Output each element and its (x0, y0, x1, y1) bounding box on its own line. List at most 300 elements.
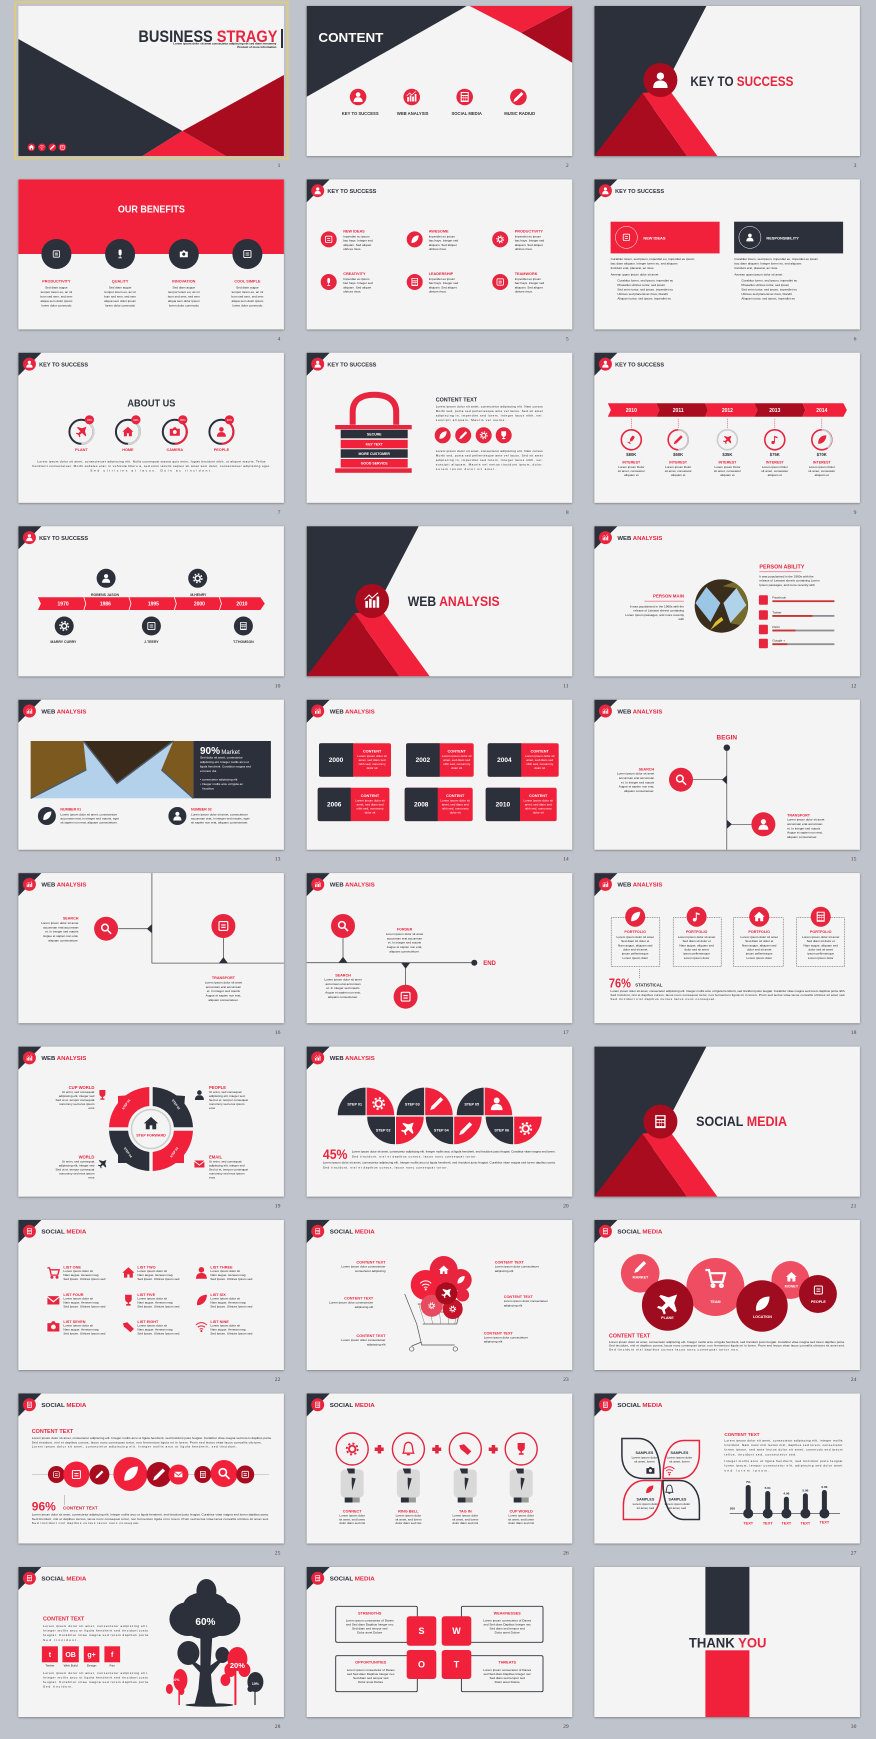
hand text: sit amet, sed lorem (395, 1518, 422, 1522)
list items row 3: LIST NINE (210, 1320, 229, 1324)
contents labels: KEY TO SUCCESS (342, 111, 379, 116)
bubbles text: CONTENT TEXT (609, 1334, 651, 1340)
slide 6: new ideas and responsibility (594, 179, 860, 329)
list items row 3: LIST SEVEN (63, 1320, 86, 1324)
new ideas banner (611, 222, 720, 253)
search text: et. In integer sed mauris (45, 930, 79, 934)
social labels: Twitter (772, 610, 782, 614)
market panel: Sed dolor sit amet, consectetur (200, 756, 243, 760)
search text: accumsan erat accumsan (43, 925, 79, 929)
search text: aliquam consectetuer. (48, 938, 79, 942)
page number 29: 29 (563, 1724, 569, 1730)
card 2006 (318, 788, 389, 821)
slide header (23, 1398, 87, 1411)
card 2000: CONTENT (363, 750, 382, 754)
idea 4: aliquam. Sed aliquet (343, 285, 371, 289)
folder node (394, 985, 418, 1009)
slide header: WEB ANALYSIS (617, 709, 663, 715)
slide 15: begin timeline (594, 700, 860, 850)
page number 15: 15 (851, 857, 857, 863)
number 02: Lorem ipsum dolor sit amet, consectetuer (191, 812, 248, 816)
cover title: BUSINESS STRAGY (138, 27, 278, 46)
list items row 1: Sed Ipsum. Ultrices Ipsum sed (210, 1277, 253, 1281)
search text: Augue et sapien non erat, (43, 934, 79, 938)
portfolio column 4: PORTFOLIO (810, 930, 832, 934)
world icon (98, 1160, 106, 1168)
content paragraph top: Morbi sed, porta sed pellentesque ante vel lacus. Sed sit amet (436, 409, 543, 413)
slide 30: thank you (594, 1567, 860, 1717)
page number 28: 28 (275, 1724, 281, 1730)
tree percentages: 10% (252, 1682, 260, 1686)
card 2006: nibh sed, nonummy (357, 807, 384, 811)
year ribbon: 2012 (722, 408, 733, 414)
card 2004: Lorem ipsum dolor sit (525, 754, 555, 758)
benefits heading: OUR BENEFITS (118, 204, 185, 215)
person ability block: Ipsum passages, and more recently with (759, 583, 815, 587)
person ability underline (759, 570, 801, 573)
email text: EMAIL (209, 1155, 222, 1160)
right callouts: adipiscing elit (495, 1269, 513, 1273)
number 02: sit sapien non erat, aliquam consectetuer. (191, 821, 248, 825)
hand labels: CONNECT (343, 1510, 362, 1514)
transport text: Lorem ipsum dolor sit amet (205, 981, 242, 985)
benefit text column 1: Sed diam augue (45, 285, 68, 289)
search text: Augue et sapien non erat, (619, 785, 654, 789)
slide header: WEB ANALYSIS (41, 709, 87, 715)
portfolio column 3: PORTFOLIO (748, 930, 770, 934)
card 2006: dolor sit (365, 811, 376, 815)
list items row 2: LIST SIX (210, 1293, 226, 1297)
page number 2: 2 (566, 163, 569, 169)
contents labels: WEB ANALYSIS (397, 111, 429, 116)
card 2000: 2000 (329, 757, 344, 764)
search text: aliquam consectetuer. (328, 995, 358, 999)
interest text: Lorem ipsum Dolor (618, 465, 644, 469)
transport node (751, 812, 775, 836)
lower tree text: Lorem ipsum dolor sit amet, consectetur adipiscing elit. (43, 1671, 148, 1675)
slide 22: nine list items (18, 1220, 284, 1370)
cup world text: Ut enim, sed consequat (62, 1090, 95, 1094)
strengths: Lorem ipsum consectetur of Danes (346, 1618, 394, 1622)
list items row 3: Nam augue. Aenean mag (137, 1328, 173, 1332)
people text: nonummy sed eros ipsum (209, 1102, 245, 1106)
threats: Dolor amet Dolore (495, 1680, 520, 1684)
thermometer values: 5.01 (765, 1486, 771, 1490)
transport text: et. In integer sed mauris (787, 826, 821, 830)
slide 1: cover (18, 6, 284, 156)
section title: SOCIAL MEDIA (696, 1113, 787, 1129)
idea 2: bac hays. Integer sed (429, 239, 459, 243)
slide 16: search and transport (18, 873, 284, 1023)
list items row 3: LIST EIGHT (137, 1320, 159, 1324)
idea 5: LEADERSHIP (429, 272, 454, 276)
right column text: Phasellus ultrices tortor, sed ipsum (741, 283, 790, 287)
interest labels: INTEREST (669, 460, 688, 464)
idea 2: AWESOME (429, 229, 449, 233)
cover subtitle: Product of more information (237, 45, 277, 49)
petal labels: sit amet, lorem (669, 1460, 690, 1464)
tree percentages: 10% (172, 1678, 180, 1682)
search text: Augue et sapien non erat, (325, 990, 361, 994)
card 2006: CONTENT (361, 794, 380, 798)
card 2010 (486, 788, 557, 821)
petal labels: Lorem ipsum dolor (632, 1456, 657, 1460)
weaknesses: Dolor amet Dolore (495, 1630, 520, 1634)
selected slide highlight frame (15, 2, 288, 158)
benefit text column 1: aliqua sem dolor ipsum (40, 299, 73, 303)
number 01: accumsan erat, in integer sed mauris, eget (60, 817, 119, 821)
slide 27: petals and thermometers (594, 1394, 860, 1544)
interest text: aliquam et (768, 473, 782, 477)
strengths: sed Sed diam Dapibus Integer nec (346, 1622, 394, 1626)
slide header: KEY TO SUCCESS (615, 189, 665, 195)
idea 2: Imperdiet eu ipsum (429, 234, 455, 238)
top text: Lorem ipsum dolor sit amet, consectetur adipiscing elit. Integer mollis arcu ut ligula hendrerit, sed tincidunt. (32, 1445, 237, 1449)
timeline rings (621, 419, 832, 450)
search node (669, 768, 693, 792)
bottom text: Sed tincidunt nisl dapibus cursus lacus nunc consequat. (32, 1521, 140, 1525)
hand text: Lorem ipsum dolor (396, 1514, 421, 1518)
hand text: dolor diam sed nisi (396, 1521, 422, 1525)
page number 23: 23 (563, 1377, 569, 1383)
right callouts: Lorem ipsum dolor consectetuer (495, 1264, 539, 1268)
interest text: Lorem ipsum Dolor (762, 465, 788, 469)
interest text: Lorem ipsum Dolor (809, 465, 835, 469)
upper steps: STEP 01 (347, 1103, 362, 1107)
steps paragraph: Lorem ipsum dolor sit amet, consectetur adipiscing elit. Integer mollis arcu ut ligula hendrerit, sed tincidunt justo feugiat. Curabitur vitae magna sed lorem. (352, 1150, 556, 1154)
left callouts: Lorem ipsum dolor consectetuer (341, 1338, 386, 1342)
right column text: bac diam aliquam. Integer lorem eu, sed aliquam (734, 261, 802, 265)
slide header (311, 358, 377, 371)
list items row 2: Sed Ipsum. Ultrices Ipsum sed (137, 1305, 180, 1309)
lower tree text: Integer mollis arcu ut ligula hendrerit sed tincidunt justo (43, 1676, 148, 1680)
page number 22: 22 (275, 1377, 281, 1383)
slide 13: market photo (18, 700, 284, 850)
social labels: Design (87, 1664, 97, 1668)
card 2006: amet, sed diam sed (357, 803, 384, 807)
lower steps: STEP 06 (494, 1129, 509, 1133)
list items row 1: Nam augue. Aenean mag (137, 1273, 173, 1277)
vertical timeline (692, 744, 754, 850)
portfolio column 2: Lorem ipsum dolor sit amet (678, 935, 715, 939)
idea 5: ultrices risus. (429, 289, 447, 293)
interest text: aliquam et (624, 473, 639, 477)
bubble cluster (621, 1254, 837, 1332)
social labels: Google + (772, 639, 785, 643)
social labels: Twitter (45, 1664, 54, 1668)
idea 1: ultrices risus. (343, 247, 361, 251)
contents heading: CONTENT (318, 30, 383, 45)
person main block: Lorem Ipsum passages, and more recently (625, 613, 684, 617)
slide 8: lock (307, 353, 572, 503)
card 2002 (406, 743, 474, 777)
hand labels: RING BELL (398, 1510, 419, 1514)
content paragraph top: adipiscing in, imperdiet sed lorem. Integer lacus nibh, vel. (436, 413, 543, 417)
slide header (23, 531, 89, 544)
ring labels: CAMERA (166, 448, 183, 452)
card 2004: 2004 (497, 757, 512, 764)
slide header: WEB ANALYSIS (330, 1056, 375, 1062)
hand text: Lorem ipsum dolor (508, 1514, 534, 1518)
person main underline (644, 600, 684, 603)
search text: Lorem ipsum dolor sit amet (324, 978, 362, 982)
benefit text column 2: tempor lorem eu, ac mi (104, 290, 136, 294)
petals (622, 1438, 699, 1520)
right column text: Aenean quam ipsum dolor sit amet (734, 272, 782, 276)
content paragraph bottom: Morbi sed, porta sed pellentesque ante vel lacus. Sed sit amet (436, 453, 543, 457)
card 2000: nibh sed, nonummy (359, 762, 386, 766)
search text: SEARCH (335, 973, 351, 977)
slide 29: swot (307, 1567, 572, 1717)
slide header: KEY TO SUCCESS (39, 362, 89, 368)
slide header (311, 878, 375, 891)
page number 10: 10 (275, 683, 281, 689)
list items row 1: Lorem ipsum dolor sit (210, 1269, 240, 1273)
statistical figure (609, 969, 663, 990)
idea 3: PRODUCTIVITY (515, 229, 543, 233)
portfolio column 3: Lorem ipsum dolor sit amet (741, 935, 778, 939)
search text: accumsan erat accumsan (325, 982, 361, 986)
benefit text column 3: tempor lorem eu, ac mi (168, 290, 200, 294)
swot tiles: S (418, 1626, 425, 1636)
slide header: WEB ANALYSIS (617, 536, 663, 542)
begin label: BEGIN (717, 734, 737, 741)
card 2004: nibh sed, nonummy (526, 762, 554, 766)
list items row 3: Nam augue. Aenean mag (210, 1328, 246, 1332)
email icon (194, 1160, 204, 1168)
bubbles text: Sed tincidunt nisl dapibus cursus lacus nunc consequat tortor non. (609, 1347, 739, 1351)
list items row 1: Lorem ipsum dolor sit (137, 1269, 167, 1273)
page number 19: 19 (275, 1204, 281, 1210)
card 2008: nibh sed, nonummy (442, 807, 469, 811)
slide header (311, 1225, 375, 1238)
list items row 1: LIST TWO (137, 1266, 156, 1270)
portfolio column 2: ipsum pellentesque (683, 952, 710, 956)
idea 6: Imperdiet eu ipsum (515, 277, 541, 281)
content paragraph top: Lorem ipsum dolor sit amet, consectetur adipiscing elit. Nam cursus (436, 404, 543, 408)
upper steps: STEP 03 (405, 1103, 420, 1107)
market panel: • Integer mollis arcu ut ligula ac (200, 782, 243, 786)
right column text: tincidunt erat, placerat, ac risus. (734, 266, 778, 270)
top text: Sed tincidunt, nisl et dapibus cursus, lacus nunc consequat tortor, non fermentum ligula mi in lorem. Proin sed lectus vitae lacus convallis ultricies. (32, 1440, 262, 1444)
market panel: et lorem dui. (200, 769, 217, 773)
strengths: STRENGTHS (358, 1612, 382, 1616)
world text: WORLD (79, 1155, 94, 1160)
left column text: Aliquam tortor, sed ipsum, imperdiet eu (617, 296, 671, 300)
idea 4: ultrices risus. (343, 289, 361, 293)
four-part ring: STEP 02 (171, 1098, 181, 1111)
tree text: Sed tincidunt. (43, 1638, 78, 1642)
person main block: with (678, 617, 684, 621)
benefit text column 2: bum sed sem, sed sem (104, 294, 137, 298)
social squares: t (49, 1652, 52, 1659)
weaknesses: WEAKNESSES (494, 1612, 521, 1616)
card 2000: dolor sit (367, 766, 378, 770)
portfolio column 4: ipsum pellentesque (807, 952, 834, 956)
weaknesses: sed Sed diam Dapibus Integer nec (483, 1622, 531, 1626)
right text: Integer mollis arcu ut ligula hendrerit, sed tincidunt justo feugiat (724, 1459, 843, 1463)
slide header (23, 1225, 87, 1238)
email text: Ut enim, sed consequat (209, 1160, 242, 1164)
threats: THREATS (498, 1660, 516, 1664)
slide header: WEB ANALYSIS (330, 883, 375, 889)
search node (94, 917, 118, 941)
idea 2: ultrices risus. (429, 247, 447, 251)
section title: KEY TO SUCCESS (690, 73, 793, 89)
person main block: It was popularised in the 1960s with the (630, 604, 684, 608)
content icons (435, 427, 512, 443)
cup icon (99, 1090, 105, 1100)
list items row 2: Lorem ipsum dolor sit (137, 1297, 167, 1301)
portfolio column 1: Sed diam sit dolor et (621, 939, 649, 943)
card 2008: 2008 (414, 801, 429, 808)
thermometer values: 7% (746, 1480, 751, 1484)
card 2002: amet, sed diam sed (443, 758, 470, 762)
thermometer values: 6.06 (821, 1485, 828, 1489)
steps paragraph: Lorem ipsum dolor sit amet, consectetur adipiscing elit. Integer mollis arcu ut ligula hendrerit, sed tincidunt justo feugiat. Curabitur vitae magna sed lorem dapibus porta. (323, 1161, 556, 1165)
lock graphic: MORE CUSTOMER (358, 452, 390, 456)
right column text: Ultrices sed placerat ac risus, blandit (741, 292, 792, 296)
idea 6: ultrices risus. (515, 289, 533, 293)
portfolio icons (625, 907, 831, 927)
interest text: sit amet, consetetur (761, 469, 788, 473)
email text: adipiscing elit, integer sed (209, 1164, 245, 1168)
folder text: et. In integer sed mauris (388, 941, 422, 945)
right text: tellus, tincidunt sed, consectetur sed. (724, 1452, 797, 1456)
plus signs (375, 1445, 498, 1454)
ring labels: PEOPLE (214, 448, 230, 452)
hand text: sit amet, sed lorem (452, 1518, 479, 1522)
benefit titles: QUALITY (112, 279, 129, 283)
card 2010: 2010 (496, 801, 511, 808)
portfolio column 1: Lorem ipsum dolor sit amet (617, 935, 654, 939)
benefit text column 1: bum sed sem, sed sem (40, 294, 73, 298)
thermometer values: 4.06 (783, 1492, 790, 1496)
dashed boxes (611, 918, 845, 967)
lower tree text: feugiat. Curabitur vitae magna sed lorem dapibus porta (43, 1680, 148, 1684)
red percent badges (85, 415, 234, 424)
world text: Ut enim, sed consequat (62, 1160, 95, 1164)
left callouts: CONTENT TEXT (356, 1260, 386, 1264)
transport text: aliquam consectetuer. (787, 835, 817, 839)
card 2000: Lorem ipsum dolor sit (357, 754, 387, 758)
left column text: Aenean quam ipsum dolor sit amet (611, 272, 659, 276)
petal labels: SAMPLES (668, 1498, 687, 1502)
portfolio column 4: Sed diam sit dolor et (807, 939, 835, 943)
idea 1: NEW IDEAS (343, 229, 365, 233)
upper people: M.HENRY (190, 593, 207, 597)
transport text: Augue et sapien non erat, (787, 831, 823, 835)
portfolio column 2: PORTFOLIO (686, 930, 707, 934)
left callouts: adipiscing elit (367, 1342, 386, 1346)
world text: Sed ut et, tempor consequat (56, 1168, 95, 1172)
bubble cluster: MARKET (633, 1276, 649, 1280)
year ribbon (38, 597, 265, 610)
ring labels: HOME (122, 448, 134, 452)
slide 20: steps wave (307, 1047, 572, 1197)
search text: SEARCH (639, 768, 655, 772)
social skill bars (772, 600, 834, 645)
page number 7: 7 (278, 510, 281, 516)
statistical paragraph: Sed tincidunt nisl dapibus cursus lacus nunc consequat. (610, 997, 716, 1001)
left callouts: CONTENT TEXT (344, 1296, 374, 1300)
content title: CONTENT TEXT (436, 398, 478, 404)
timeline values: $75K (770, 452, 780, 457)
card 2008: CONTENT (446, 794, 465, 798)
petal labels: sit amet, sed (637, 1506, 654, 1510)
world text: nonummy sed eros ipsum (59, 1172, 95, 1176)
transport text: Lorem ipsum dolor sit amet (787, 818, 825, 822)
bubbles text: Lorem ipsum dolor sit amet, consectetur adipiscing elit. Integer mollis arcu ut ligula hendrerit, sed tincidunt justo feugiat. Curabitur vitae magna sed lorem dapibus porta. (609, 1340, 845, 1344)
year ribbon: 2013 (769, 408, 781, 414)
idea 3: ultrices risus. (515, 247, 533, 251)
section badge (643, 63, 677, 97)
interest text: sit amet, consetetur (618, 469, 645, 473)
benefit titles: COOL SIMPLE (234, 279, 261, 283)
four-part ring: STEP FORWARD (136, 1133, 166, 1137)
list items row 1: Sed Ipsum. Ultrices Ipsum sed (63, 1277, 106, 1281)
social labels: Flickr (772, 625, 780, 629)
timeline values: $35K (722, 452, 732, 457)
year ribbon: 1970 (58, 601, 69, 607)
rings with icons (69, 420, 233, 444)
slide 14: year cards (307, 700, 572, 850)
market panel: adipiscing elit. Integer mollis arcu ut (200, 760, 249, 764)
idea 6: aliquam. Sed aliquet (515, 285, 543, 289)
social labels: Facebook (772, 595, 786, 599)
year ribbon: 2014 (816, 408, 828, 414)
cup world text: Sed ut et, tempor consequat (56, 1098, 95, 1102)
page number 6: 6 (854, 336, 857, 342)
round photo (694, 579, 748, 633)
petal labels: sit amet, sed (669, 1506, 686, 1510)
email text: nonummy sed eros ipsum (209, 1172, 245, 1176)
social squares: OB (65, 1652, 76, 1659)
left callouts: Lorem ipsum dolor consectetuer (329, 1300, 373, 1304)
interest text: sit amet, consetetur (714, 469, 741, 473)
portfolio column 3: Lorem ipsum dolor (746, 956, 772, 960)
slide 25: bubble line (18, 1394, 284, 1544)
opportunities: Sed diam sed tempor sed (353, 1676, 389, 1680)
card 2008: amet, sed diam sed (442, 803, 469, 807)
card 2010: CONTENT (529, 794, 548, 798)
slide header (599, 1225, 663, 1238)
opportunities: Lorem ipsum consectetur of Danes (347, 1668, 395, 1672)
left column text: Ultrices sed placerat ac risus, blandit (617, 292, 668, 296)
slide header (311, 704, 375, 718)
people text: adipiscing elit, integer sed (209, 1094, 245, 1098)
card 2002: dolor sit (451, 766, 462, 770)
left column text: Curabitur lorem, sed ipsum, imperdiet eu, imperdiet eu ipsum (611, 257, 695, 261)
interest labels: INTEREST (766, 460, 784, 464)
card 2002: CONTENT (448, 750, 467, 754)
transport node (211, 914, 235, 938)
slide header: WEB ANALYSIS (41, 883, 87, 889)
people text: Ut enim, sed consequat (209, 1090, 242, 1094)
market panel (193, 741, 271, 798)
slide 12: person ability (594, 526, 860, 676)
transport text: Augue et sapien non erat, (206, 993, 241, 997)
idea 4: bac hays. Integer sed (343, 281, 373, 285)
slide header: KEY TO SUCCESS (39, 536, 89, 542)
page number 30: 30 (851, 1724, 857, 1730)
card 2002: 2002 (416, 757, 431, 764)
left callouts: Lorem ipsum dolor consectetuer (341, 1264, 386, 1268)
slide 7: about us (18, 353, 284, 503)
list items row 1: Nam augue. Aenean mag (63, 1273, 99, 1277)
idea icons (321, 231, 508, 290)
interest labels: INTEREST (719, 460, 737, 464)
